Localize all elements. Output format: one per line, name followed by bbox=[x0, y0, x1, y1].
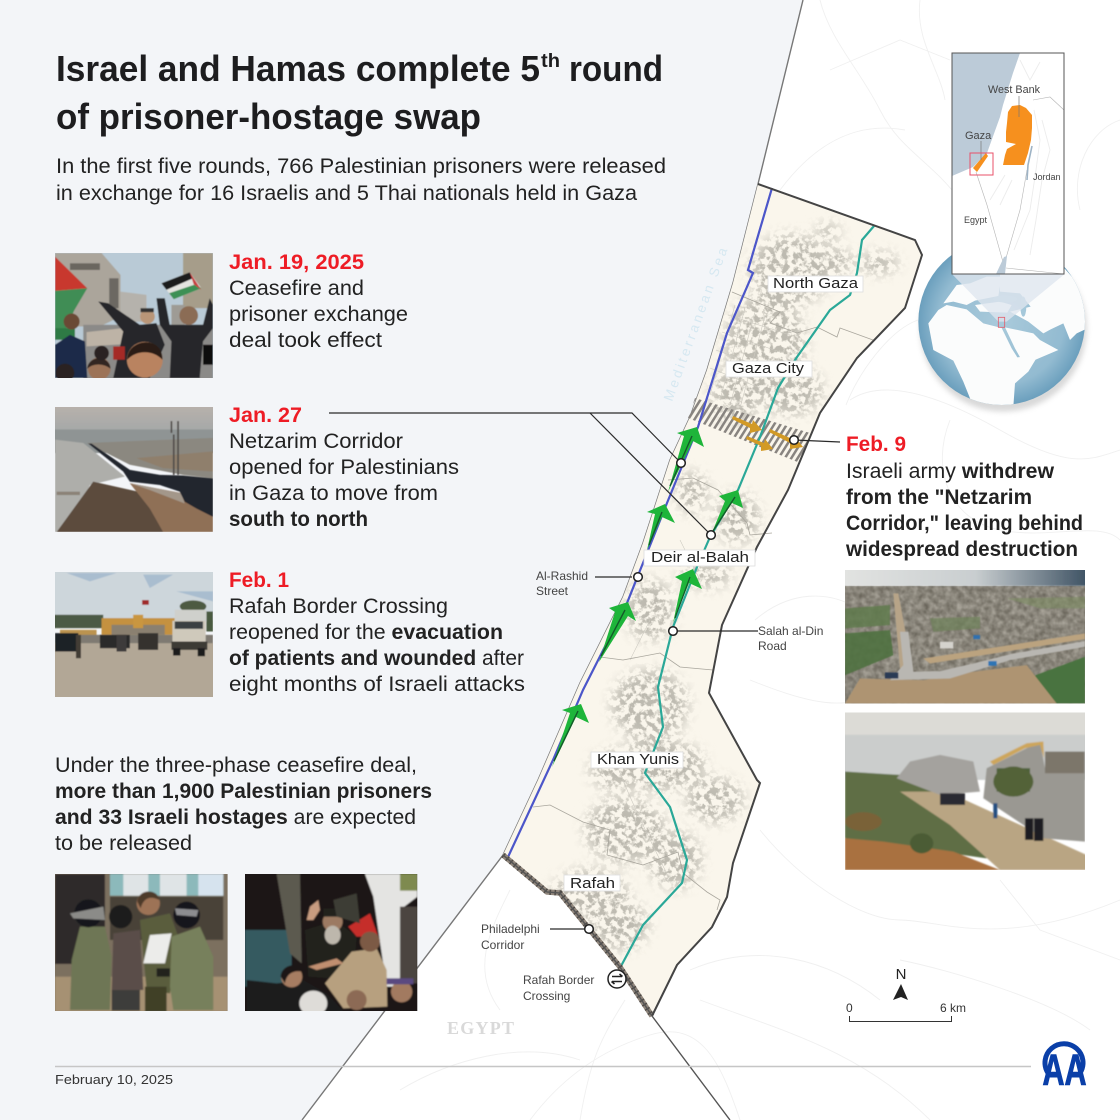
Gaza shape bbox=[973, 153, 988, 172]
title: round bbox=[569, 48, 663, 89]
timeline entry: Jan. 27: Jan. 27 bbox=[229, 403, 302, 427]
label: Khan Yunis: Khan Yunis bbox=[597, 752, 679, 768]
photo: crowd walking along Netzarim road bbox=[55, 407, 213, 532]
timeline entry: Feb. 9: Corridor," leaving behind bbox=[846, 511, 1083, 535]
text block: ceasefire deal: more than 1,900 Palestinian prisoners bbox=[55, 779, 432, 803]
label: Philadelphi Corridor: Corridor bbox=[481, 938, 524, 952]
label: Mediterranean Sea: Mediterranean Sea bbox=[661, 245, 730, 403]
compass: north arrow bbox=[893, 966, 908, 1000]
timeline entry: Jan. 27 bbox=[229, 403, 459, 531]
label: Gaza City: Gaza City bbox=[732, 361, 805, 377]
timeline entry: Jan. 19, 2025: Jan. 19, 2025 bbox=[229, 250, 364, 274]
West Bank shape bbox=[1003, 105, 1032, 165]
timeline entry: Feb. 1: of patients and wounded after bbox=[229, 646, 524, 670]
label: Al-Rashid Street: Street bbox=[536, 584, 569, 598]
scale bar bbox=[846, 1001, 966, 1022]
label: Egypt: EGYPT bbox=[447, 1018, 514, 1038]
arrow 5 bbox=[599, 602, 636, 662]
locator rectangle bbox=[998, 317, 1005, 327]
label: Rafah Border Crossing: Crossing bbox=[523, 989, 570, 1003]
timeline entry: Feb. 9: Israeli army withdrew bbox=[846, 459, 1054, 483]
label: Al-Rashid Street: Al-Rashid bbox=[536, 569, 588, 583]
timeline entry: Feb. 9 bbox=[845, 432, 1083, 561]
arrow 4 bbox=[673, 569, 702, 623]
marker dots bbox=[585, 436, 798, 933]
footer rule bbox=[55, 1066, 1031, 1068]
inset sea bbox=[952, 53, 1020, 176]
inset map bbox=[952, 53, 1064, 274]
Asia bbox=[1000, 263, 1087, 340]
orange withdrawal arrows bbox=[732, 416, 803, 451]
timeline entry: Jan. 27: Netzarim Corridor bbox=[229, 429, 403, 453]
street grid of Gaza City bbox=[615, 305, 790, 880]
timeline entry: Feb. 1 bbox=[229, 568, 525, 696]
route: Salah al-Din Road bbox=[620, 226, 874, 968]
timeline entry: Feb. 1: Rafah Border Crossing bbox=[229, 594, 448, 618]
hatched zone: Netzarim Corridor bbox=[688, 398, 810, 463]
photo: Rafah crossing gate bbox=[55, 572, 213, 697]
inset land bbox=[952, 53, 1064, 274]
Gulf of Aqaba bbox=[996, 256, 1007, 274]
continents bbox=[928, 263, 1087, 407]
urban areas bbox=[552, 224, 898, 949]
timeline entry: Jan. 27: south to north bbox=[229, 507, 368, 531]
title: th bbox=[541, 51, 560, 72]
arrow 6 bbox=[552, 704, 589, 767]
Jordan river and Dead Sea bbox=[1027, 146, 1032, 180]
philadelphi corridor strip bbox=[503, 855, 652, 1016]
arrow 3 bbox=[711, 490, 743, 535]
label: Deir al-Balah: Deir al-Balah bbox=[651, 550, 749, 566]
panel: grey sea and text background bbox=[0, 0, 803, 1120]
inset labels: Jordan bbox=[1033, 172, 1061, 182]
footer date: February 10, 2025 bbox=[55, 1072, 173, 1087]
leader lines bbox=[329, 413, 840, 929]
timeline entry: Feb. 1: reopened for the evacuation bbox=[229, 620, 503, 644]
globe shadow bbox=[920, 245, 1087, 412]
Egypt border lines bbox=[503, 855, 730, 1120]
inset red frame bbox=[970, 153, 993, 175]
inset relief bbox=[990, 60, 1050, 255]
Arabia bbox=[1005, 327, 1058, 361]
photo: ruined buildings and dirt road bbox=[845, 712, 1085, 870]
inset labels: West Bank bbox=[988, 84, 1040, 96]
timeline entry: Jan. 19, 2025: Ceasefire and bbox=[229, 276, 364, 300]
coastline bbox=[302, 0, 803, 1120]
green movement arrows bbox=[552, 427, 743, 767]
label: North Gaza: North Gaza bbox=[773, 276, 859, 292]
label: Salah al-Din Road: Salah al-Din bbox=[758, 624, 823, 638]
title: Israel and Hamas complete 5 bbox=[56, 48, 540, 89]
logo: Anadolu Agency bbox=[1042, 1044, 1086, 1094]
scale bar: 6 km bbox=[940, 1001, 966, 1015]
Europe bbox=[943, 277, 1002, 305]
administrative boundaries bbox=[533, 292, 873, 910]
route: Al-Rashid Street bbox=[508, 188, 772, 857]
inset leaders bbox=[981, 96, 1019, 160]
timeline entry: Jan. 19, 2025: deal took effect bbox=[229, 328, 382, 352]
timeline entry: Feb. 1: Feb. 1 bbox=[229, 568, 289, 592]
timeline entry: Jan. 19, 2025: prisoner exchange bbox=[229, 302, 408, 326]
timeline entry: Feb. 9: from the "Netzarim bbox=[846, 485, 1032, 509]
Gaza territory bbox=[503, 184, 922, 1016]
label: Rafah bbox=[564, 875, 620, 892]
photo: released prisoner at bus bbox=[245, 874, 418, 1011]
timeline entry: Feb. 1: eight months of Israeli attacks bbox=[229, 672, 525, 696]
timeline entry: Jan. 27: opened for Palestinians bbox=[229, 455, 459, 479]
globe sphere bbox=[918, 238, 1085, 405]
arrow 1 bbox=[668, 427, 704, 492]
label: Philadelphi Corridor: Philadelphi bbox=[481, 922, 540, 936]
inset labels: Gaza bbox=[965, 130, 992, 142]
timeline entry: Jan. 19, 2025 bbox=[229, 250, 408, 352]
title: of prisoner-hostage swap bbox=[56, 96, 481, 137]
inset frame bbox=[952, 53, 1064, 274]
label: Salah al-Din Road: Road bbox=[758, 639, 787, 653]
icon: Rafah crossing bbox=[608, 970, 626, 988]
philadelphi corridor ticks bbox=[503, 855, 652, 1016]
Gaza land border bbox=[652, 184, 922, 1016]
text block: ceasefire deal: Under the three-phase ceasefire deal, bbox=[55, 753, 417, 777]
timeline entry: Jan. 27: in Gaza to move from bbox=[229, 481, 438, 505]
photo: hostage handover bbox=[55, 874, 228, 1011]
scale bar: 0 bbox=[846, 1001, 853, 1015]
inset labels: Egypt bbox=[964, 215, 988, 225]
inset labels bbox=[964, 84, 1061, 225]
inset borders bbox=[976, 97, 1064, 274]
map roads on land bbox=[400, 0, 1120, 1120]
Black Sea bbox=[1000, 302, 1001, 303]
Anatolia bbox=[975, 302, 1012, 313]
photo: drone view of destruction bbox=[845, 570, 1085, 704]
timeline entry: Feb. 9: widespread destruction bbox=[845, 537, 1078, 561]
subtitle: in exchange for 16 Israelis and 5 Thai nationals held in Gaza bbox=[56, 181, 637, 205]
globe locator bbox=[918, 238, 1087, 412]
compass: north arrow: N bbox=[896, 966, 906, 983]
label: Rafah Border Crossing: Rafah Border bbox=[523, 973, 594, 987]
photo: celebration with flags bbox=[55, 253, 213, 378]
logo: Anadolu Agency: AA bbox=[1042, 1046, 1086, 1094]
Africa bbox=[928, 305, 1038, 407]
text block: ceasefire deal bbox=[55, 753, 432, 855]
subtitle: In the first five rounds, 766 Palestinian prisoners were released bbox=[56, 154, 666, 178]
Caspian bbox=[1020, 297, 1026, 317]
text block: ceasefire deal: to be released bbox=[55, 831, 192, 855]
zoom wedge bbox=[952, 274, 1064, 322]
map: Gaza Strip bbox=[503, 184, 922, 1016]
label: Rafah: Rafah bbox=[570, 876, 615, 892]
timeline entry: Feb. 9: Feb. 9 bbox=[846, 432, 906, 456]
arrow 2 bbox=[647, 504, 675, 550]
text block: ceasefire deal: and 33 Israeli hostages are expected bbox=[55, 805, 416, 829]
